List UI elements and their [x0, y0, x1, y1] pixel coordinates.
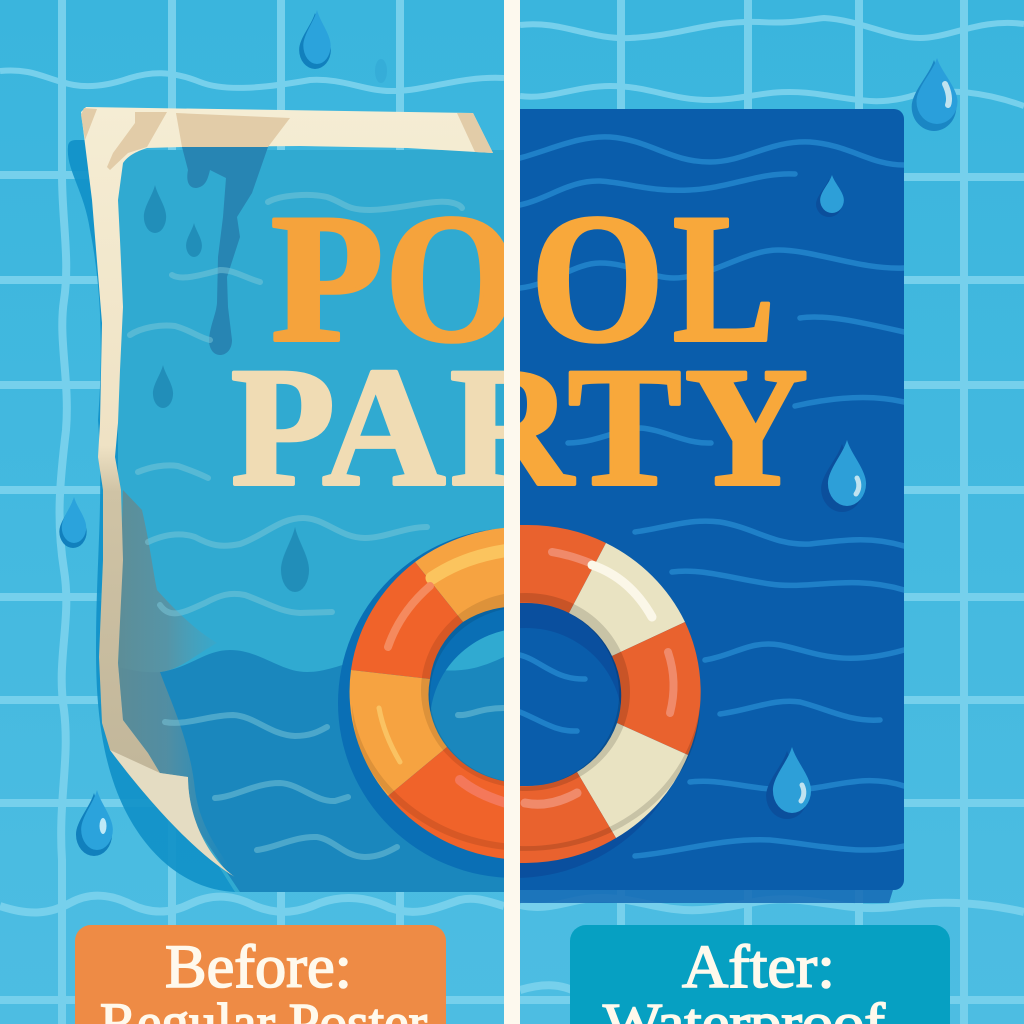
drop: faint smudge	[375, 59, 387, 83]
ring highlights	[379, 550, 510, 804]
life ring: before half	[350, 528, 504, 859]
poster surface	[510, 109, 904, 890]
rain drop on poster	[766, 747, 811, 819]
drop: top left	[299, 10, 331, 69]
poster surface	[118, 150, 504, 892]
life ring shadow	[338, 528, 692, 878]
wave lines	[520, 137, 904, 856]
drop: lower left	[76, 790, 113, 856]
label: after	[570, 925, 950, 1024]
paper stains	[81, 108, 493, 170]
right poster shadow	[520, 880, 896, 903]
life ring: after half	[520, 525, 701, 863]
title: POOL: O	[531, 177, 664, 380]
left poster shadow	[68, 140, 500, 892]
drop: top right	[912, 58, 958, 131]
faded wave lines	[130, 195, 504, 857]
pool water drops	[59, 10, 958, 856]
rain drop on poster	[821, 440, 866, 512]
ring shading	[352, 706, 504, 850]
poster water area	[160, 650, 504, 892]
drop: left middle	[59, 497, 87, 548]
title: PARTY	[232, 370, 807, 486]
ring highlights	[525, 552, 674, 804]
torn paper border	[81, 107, 493, 877]
peeling corner	[110, 750, 235, 877]
title: PARTY: PAR	[231, 333, 575, 521]
panel: before, worn poster	[81, 107, 504, 892]
label: before: Before:	[165, 934, 352, 1001]
drips on poster	[144, 185, 309, 592]
panel: after, waterproof poster	[510, 109, 904, 890]
rain drop on poster	[816, 175, 844, 217]
title: POOL: O	[385, 177, 518, 380]
label: before	[75, 925, 446, 1024]
title: POOL: L	[673, 176, 775, 380]
ink run from top edge	[182, 147, 268, 355]
title: POOL	[271, 176, 775, 380]
title: PARTY: RTY	[450, 333, 808, 521]
grey water stain, lower left	[118, 490, 219, 860]
label: after: After:	[682, 934, 835, 1001]
center divider	[504, 0, 520, 1024]
title: POOL: P	[271, 176, 383, 380]
ring shading	[520, 706, 700, 851]
